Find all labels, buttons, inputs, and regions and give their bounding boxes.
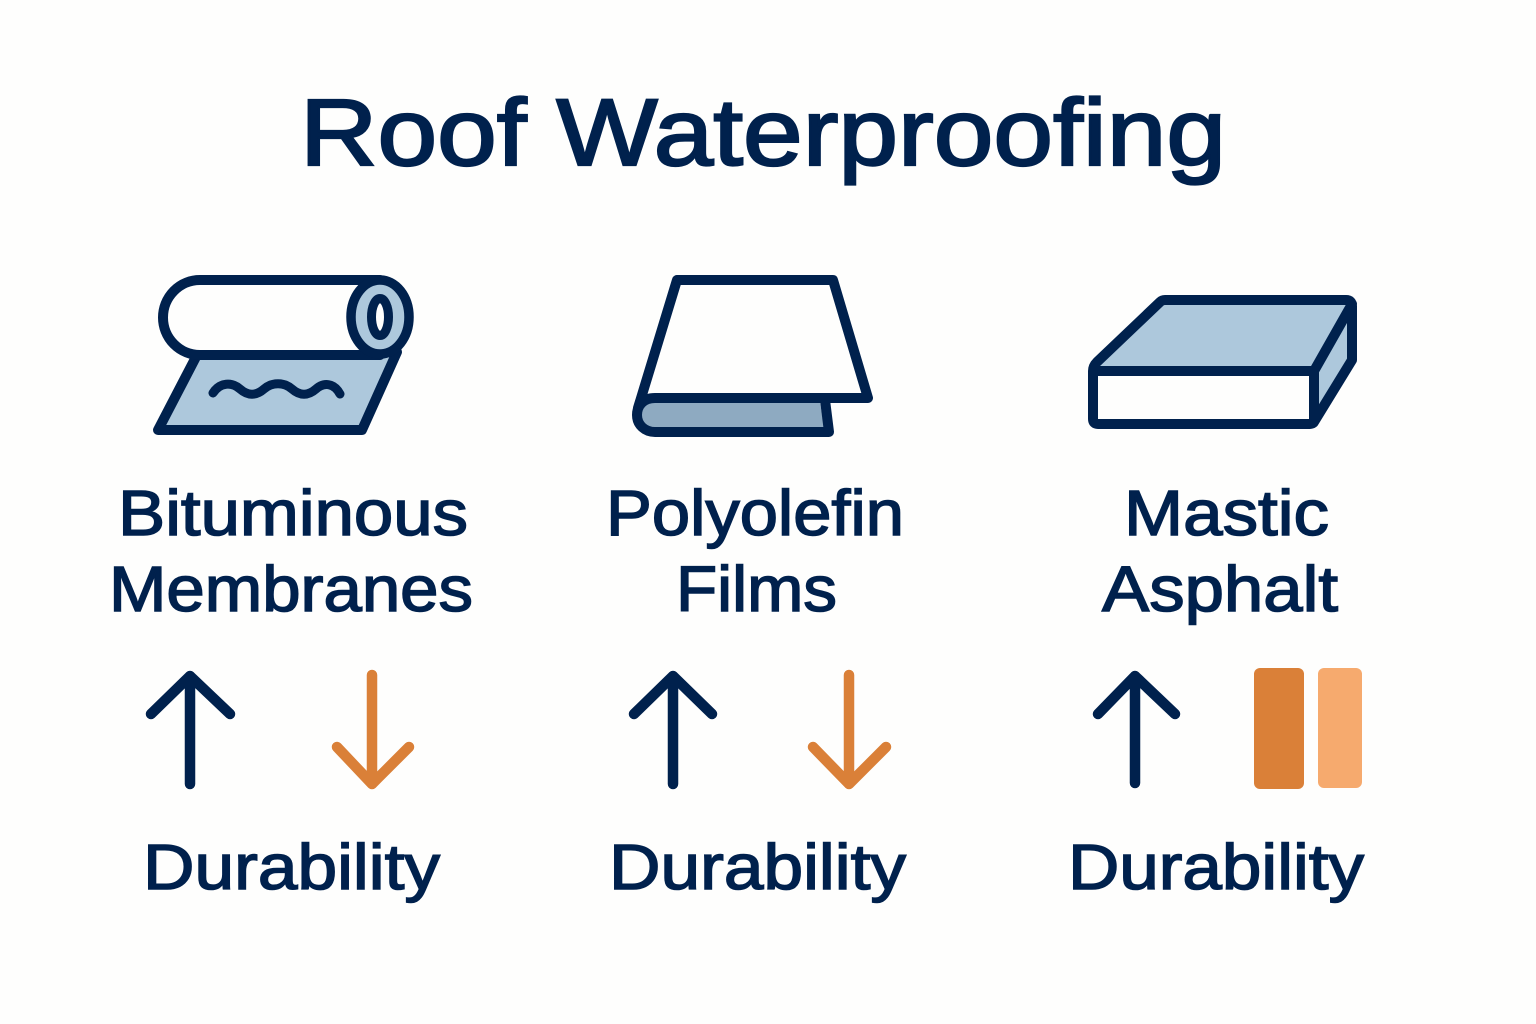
icon: two orange bars: [1254, 668, 1362, 789]
label: Bituminous Membranes: [109, 477, 473, 625]
column: Polyolefin Films: [606, 280, 906, 903]
arrow: up: [1098, 676, 1175, 783]
label: Polyolefin Films: Polyolefin: [606, 477, 904, 549]
label: Polyolefin Films: Films: [676, 553, 837, 625]
label: Durability: Durability: [609, 831, 906, 903]
icon: folded film: [637, 280, 868, 432]
column: Mastic Asphalt: [1068, 300, 1364, 903]
label: Mastic Asphalt: Mastic: [1124, 477, 1329, 549]
arrow: down: [813, 675, 886, 784]
label: Bituminous Membranes: Membranes: [109, 553, 473, 625]
arrow: down: [337, 675, 409, 784]
arrow: up: [634, 676, 712, 784]
label: Mastic Asphalt: Asphalt: [1102, 553, 1338, 625]
label: Bituminous Membranes: Bituminous: [118, 477, 468, 549]
icon: membrane roll: [158, 280, 409, 430]
label: Durability: Durability: [1068, 831, 1364, 903]
arrow: up: [151, 676, 230, 784]
label: Durability: Durability: [143, 831, 440, 903]
column: Bituminous Membranes: [109, 280, 473, 903]
label: Polyolefin Films: [606, 477, 904, 625]
label: Mastic Asphalt: [1102, 477, 1338, 625]
title: Roof Waterproofing: [300, 80, 1226, 186]
icon: asphalt block: [1093, 300, 1352, 424]
